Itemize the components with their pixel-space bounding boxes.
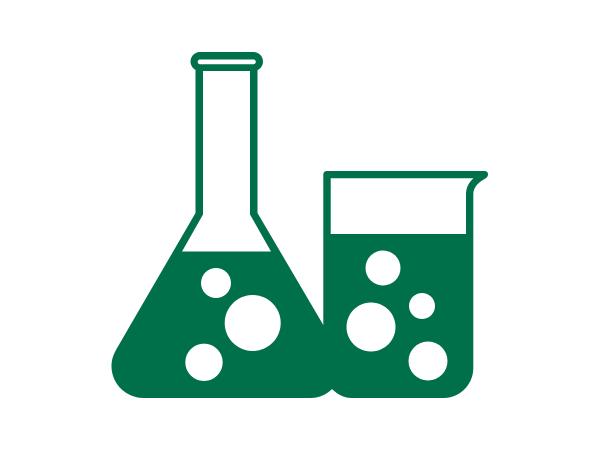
flask body with liquid — [112, 70, 340, 398]
flask bubble bottom — [185, 344, 223, 381]
beaker bubble small — [409, 293, 435, 319]
flask lip — [190, 52, 263, 71]
beaker body with liquid — [323, 171, 488, 398]
beaker bubble bottom — [408, 342, 448, 380]
icon: beaker — [323, 171, 488, 398]
flask bubble small top — [201, 268, 231, 298]
icon: erlenmeyer flask — [112, 52, 340, 398]
flask bubble large — [225, 295, 281, 351]
beaker bubble large — [346, 302, 396, 352]
beaker bubble top — [366, 250, 400, 286]
